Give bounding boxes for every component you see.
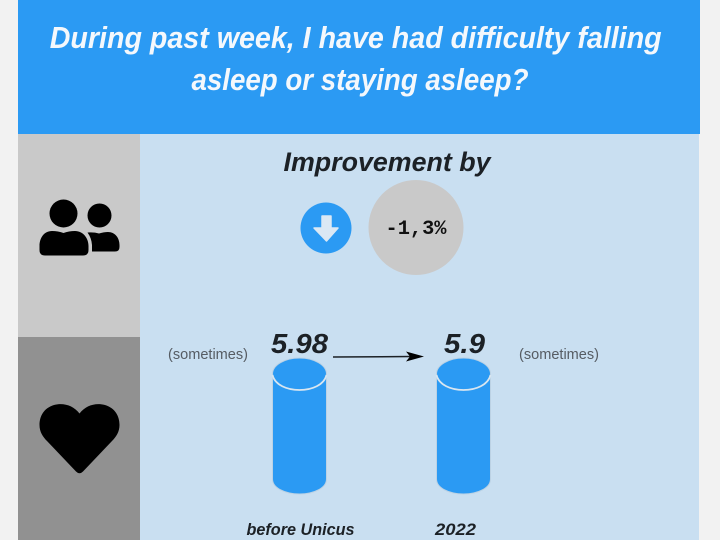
label: 2022: 2022 xyxy=(434,520,477,539)
panel: people sidebar xyxy=(18,134,140,337)
panel: main content xyxy=(140,134,699,540)
title: asleep or staying asleep? xyxy=(192,62,529,97)
icon: heart xyxy=(40,404,120,473)
value: 5.9: 5.9 xyxy=(444,328,485,359)
bar: before Unicus xyxy=(272,358,326,494)
arrow xyxy=(333,352,424,362)
panel: title banner xyxy=(18,0,700,134)
value: 5.98: 5.98 xyxy=(271,328,328,359)
icon: people xyxy=(40,200,120,256)
label: before Unicus: before Unicus xyxy=(246,520,354,539)
callout: percent change xyxy=(368,180,464,275)
callout: percent change: -1,3% xyxy=(386,218,448,241)
label: left sometimes: (sometimes) xyxy=(168,347,248,363)
heading: improvement by: Improvement by xyxy=(284,147,492,177)
label: right sometimes: (sometimes) xyxy=(519,347,599,363)
panel: heart sidebar xyxy=(18,337,140,540)
icon: down arrow xyxy=(300,202,352,254)
bar: 2022 xyxy=(436,358,490,494)
title: During past week, I have had difficulty falling xyxy=(50,20,662,55)
